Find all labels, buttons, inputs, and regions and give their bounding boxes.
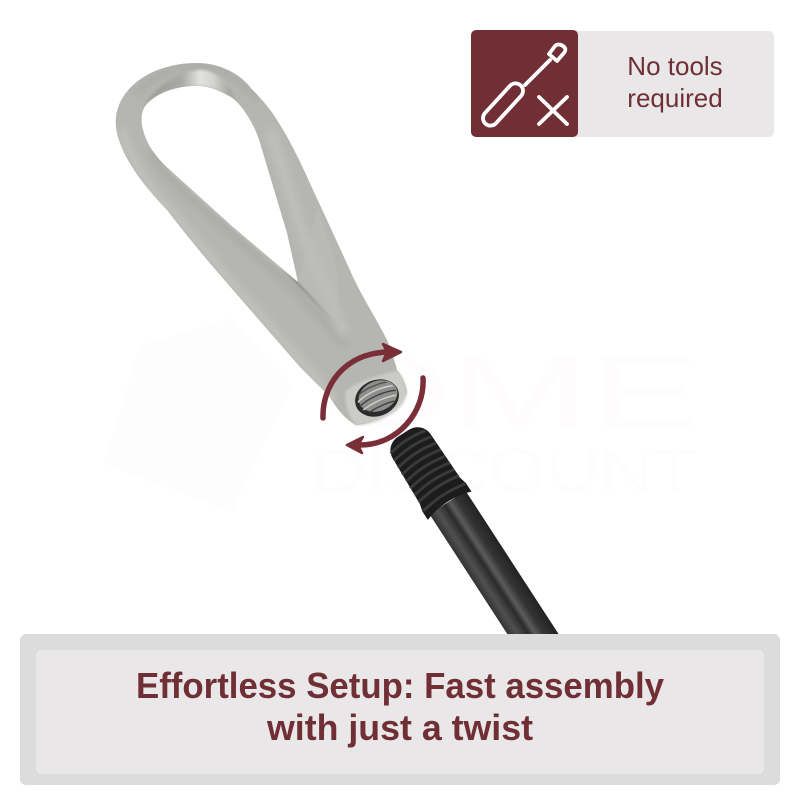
- metal loop handle: [116, 63, 407, 425]
- badge label: No tools: [627, 51, 723, 81]
- icon tile: [471, 30, 578, 137]
- threaded black rod: [381, 419, 573, 676]
- rotation arrow: clockwise top: [323, 344, 401, 418]
- V notch crease: [284, 270, 328, 314]
- watermark logo: [104, 318, 700, 512]
- handle soft shading: [122, 66, 345, 400]
- inner rim highlight: [146, 69, 234, 104]
- rotation arrow: counter-clockwise bottom: [347, 378, 423, 453]
- screw ridges: [386, 426, 465, 511]
- V notch facet: [298, 282, 322, 306]
- caption panel: [20, 634, 780, 785]
- watermark logo: OME: [320, 336, 700, 448]
- watermark logo: DISCOUNT: [312, 437, 698, 506]
- caption panel: with just a twist: [266, 707, 533, 748]
- threaded socket hole: [355, 379, 399, 417]
- badge: no tools required: [471, 30, 774, 137]
- icon: screwdriver crossed out: [480, 45, 567, 129]
- caption text: Effortless Setup: Fast assembly: [136, 665, 664, 706]
- badge: no tools required: required: [627, 83, 723, 113]
- bottom cap face: [345, 371, 407, 425]
